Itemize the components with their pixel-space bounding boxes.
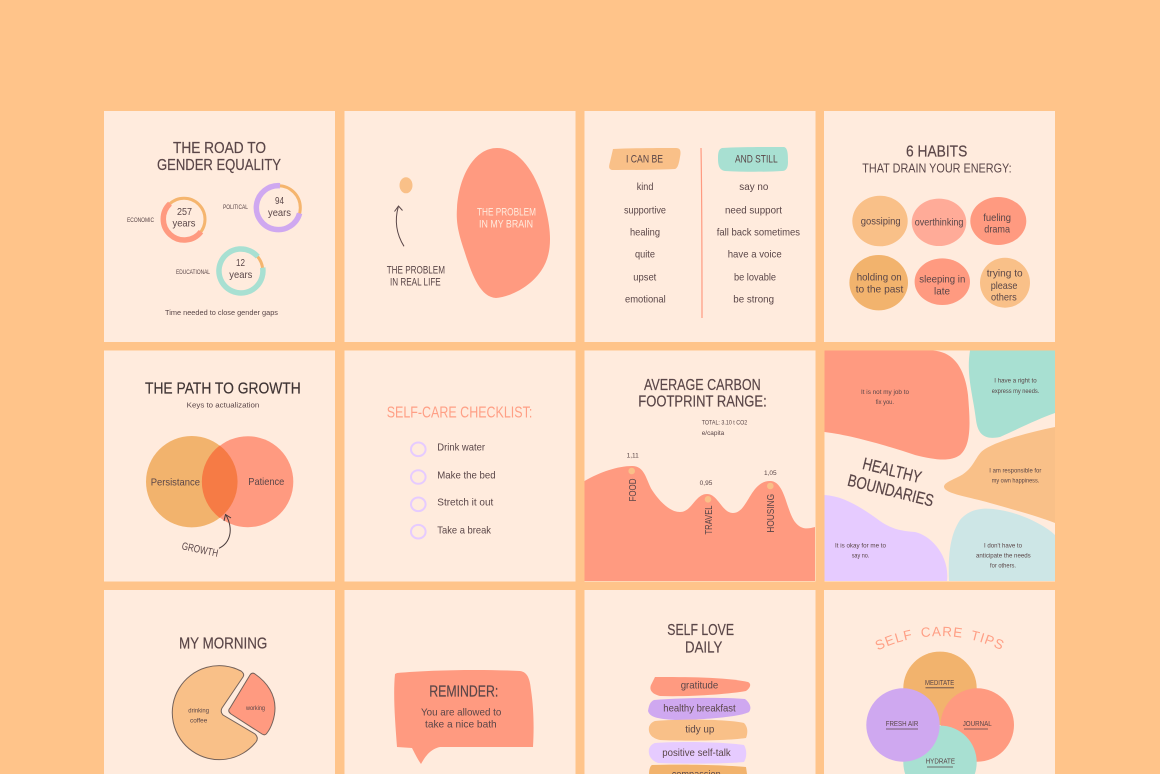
pie chart: working (245, 705, 265, 712)
divider line (701, 148, 702, 318)
panel: 6 habits (824, 111, 1055, 342)
blob: anticipate needs (949, 509, 1055, 581)
bubble: overthinking: overthinking (915, 217, 964, 229)
subheading: keys to actualization: Keys to actualization (187, 402, 259, 409)
list: and still: say no (739, 181, 768, 193)
heading: healthy boundaries (846, 454, 936, 511)
blob: anticipate needs: for others. (990, 563, 1016, 570)
ring: educational 12 years (219, 249, 263, 293)
text: the problem in real life: IN REAL LIFE (390, 277, 441, 289)
pie chart: coffee (190, 718, 208, 725)
heading: average carbon footprint range: FOOTPRINT RANGE: (638, 394, 767, 411)
blob: problem in my brain: THE PROBLEM (477, 207, 536, 219)
circle: fresh air (866, 688, 940, 762)
area chart: HOUSING (765, 494, 777, 533)
bubble: holding on to the past: holding on (857, 272, 902, 284)
stroke: gratitude: gratitude (681, 679, 718, 691)
bubble: trying to please others: trying to (987, 268, 1023, 280)
bubble: sleeping in late: late (934, 285, 950, 297)
blob: right to express: I have a right to (994, 378, 1037, 385)
dot: problem in real life (400, 177, 412, 193)
area chart: TRAVEL (703, 505, 715, 534)
list: and still: be lovable (734, 271, 776, 283)
heading: self love daily: SELF LOVE (667, 622, 734, 639)
bubble: gossiping: gossiping (861, 215, 901, 227)
tag: and still (718, 147, 788, 172)
panel: i can be and still (584, 111, 816, 342)
stroke: positive self-talk (649, 742, 746, 764)
bubble: trying to please others: please (991, 280, 1018, 292)
circle: meditate (903, 652, 977, 725)
heading: the road to gender equality: GENDER EQUALITY (157, 157, 281, 174)
heading: 6 habits (862, 144, 1012, 175)
venn diagram (146, 436, 293, 527)
checklist items: Make the bed (437, 469, 496, 481)
blob: not my job: It is not my job to (861, 389, 909, 396)
stroke: compassion (649, 765, 747, 774)
list: and still (717, 181, 800, 305)
circle: meditate: MEDITATE (925, 680, 955, 687)
heading: self love daily: DAILY (685, 639, 723, 656)
list: i can be: emotional (625, 293, 666, 305)
ring: economic 257 years: years (172, 218, 196, 230)
list: i can be (624, 181, 666, 305)
caption: time needed: Time needed to close gender gaps (165, 310, 279, 317)
heading: self care tips (arched): SELF CARE TIPS (876, 626, 1004, 650)
stroke: positive self-talk: positive self-talk (662, 747, 731, 759)
panel: my morning (104, 590, 335, 774)
list: and still: fall back sometimes (717, 227, 800, 239)
panel: reminder (344, 590, 576, 774)
stroke: healthy breakfast: healthy breakfast (663, 703, 736, 715)
speech bubble: take a nice bath (425, 718, 497, 730)
speech bubble: You are allowed to (421, 707, 501, 719)
heading: self love daily (667, 622, 734, 656)
tag: and still: AND STILL (735, 153, 778, 165)
list: i can be: healing (630, 227, 660, 239)
panel: healthy boundaries (824, 350, 1055, 582)
blob: not my job: fix you. (876, 399, 894, 406)
circle: hydrate: HYDRATE (926, 758, 955, 765)
ring: political 94 years (256, 186, 300, 230)
area chart: 1,05 (764, 470, 777, 477)
speech bubble: REMINDER: (429, 684, 498, 701)
circle: journal: JOURNAL (963, 721, 992, 728)
area chart (584, 452, 815, 581)
heading: the road to gender equality (157, 140, 281, 174)
ring: political 94 years: 94 (275, 195, 284, 207)
checklist items: Drink water (437, 441, 485, 453)
pie chart: drinking (188, 708, 209, 715)
blob: problem in my brain (457, 148, 550, 298)
venn diagram: Persistance (151, 477, 200, 489)
panel: self care tips (824, 590, 1055, 774)
heading: average carbon footprint range: AVERAGE CARBON (644, 377, 761, 394)
list: and still: have a voice (728, 249, 782, 261)
blob: anticipate needs: I don't have to (984, 542, 1022, 549)
checklist items (411, 441, 496, 538)
blob: my own happiness (944, 427, 1055, 523)
heading: the road to gender equality: THE ROAD TO (173, 140, 266, 157)
arrow: upward (394, 206, 404, 246)
label: political: POLITICAL (223, 204, 248, 211)
blob: my own happiness: my own happiness. (992, 478, 1039, 485)
tag: i can be: I CAN BE (626, 153, 663, 165)
heading: the path to growth: THE PATH TO GROWTH (145, 380, 301, 397)
panel: carbon footprint (584, 350, 816, 582)
blob: not my job (824, 350, 970, 460)
blob: okay to say no (824, 495, 947, 581)
list: i can be: supportive (624, 205, 666, 217)
ring: educational 12 years: years (229, 269, 252, 281)
panel: self love daily (584, 590, 816, 774)
list: and still: be strong (733, 293, 774, 305)
blob: anticipate needs: anticipate the needs (976, 553, 1031, 560)
circle: journal (941, 688, 1014, 762)
list: i can be: quite (635, 249, 655, 261)
heading: my morning: MY MORNING (179, 635, 267, 652)
stroke: tidy up (649, 720, 747, 741)
blob: my own happiness: I am responsible for (989, 467, 1042, 474)
list: i can be: upset (633, 271, 656, 283)
bubble: holding on to the past: to the past (856, 283, 903, 295)
blob: problem in my brain: IN MY BRAIN (479, 219, 533, 231)
blob: right to express (969, 350, 1055, 438)
note: total co2: TOTAL: 3.10 t CO2 (702, 419, 748, 426)
stroke: gratitude (650, 677, 750, 696)
tag: i can be (609, 148, 681, 170)
bubble: gossiping (852, 196, 908, 246)
arrow: growth (219, 514, 231, 548)
bubble: sleeping in late: sleeping in (919, 273, 965, 285)
area chart: 0,95 (700, 480, 713, 487)
checklist items: Take a break (437, 524, 492, 536)
ring: educational 12 years: 12 (236, 257, 245, 269)
area chart: 1,11 (627, 452, 639, 459)
ring: economic 257 years (163, 198, 205, 240)
pie chart (172, 666, 275, 760)
label: educational: EDUCATIONAL (176, 269, 210, 276)
heading: 6 habits: 6 HABITS (906, 144, 967, 161)
panel: path to growth (104, 350, 335, 582)
text: the problem in real life: THE PROBLEM (387, 265, 445, 277)
text: the problem in real life (387, 265, 445, 289)
heading: 6 habits: THAT DRAIN YOUR ENERGY: (862, 160, 1012, 175)
panel: gender equality (104, 111, 335, 342)
heading: healthy boundaries: HEALTHY (861, 454, 923, 487)
blob: right to express: express my needs. (992, 388, 1039, 395)
heading: self-care checklist: SELF-CARE CHECKLIST: (387, 405, 532, 422)
bubble: fueling drama: drama (984, 224, 1010, 236)
bubble: holding on to the past (849, 255, 908, 310)
ring: political 94 years: years (268, 207, 291, 219)
circle: fresh air: FRESH AIR (886, 721, 918, 728)
bubble: overthinking (912, 199, 966, 246)
panel: self-care checklist (344, 350, 576, 582)
bubble: fueling drama (970, 197, 1026, 245)
heading: average carbon footprint range (638, 377, 767, 411)
blob: okay to say no: It is okay for me to (835, 542, 886, 549)
panel: problem in real life vs brain (344, 111, 576, 342)
circle: hydrate (903, 726, 977, 774)
bubble: sleeping in late (915, 258, 970, 305)
speech bubble (394, 670, 534, 764)
stroke: tidy up: tidy up (685, 724, 714, 736)
label: economic: ECONOMIC (127, 217, 154, 224)
note: total co2: e/capita (702, 430, 725, 437)
bubble: trying to please others: others (991, 292, 1017, 304)
bubble: trying to please others (980, 258, 1030, 308)
heading: healthy boundaries: BOUNDARIES (846, 471, 936, 511)
note: total co2 (702, 419, 748, 437)
stroke: healthy breakfast (648, 698, 750, 720)
list: i can be: kind (637, 181, 654, 193)
checklist items: Stretch it out (437, 497, 493, 509)
label: growth: GROWTH (181, 540, 219, 560)
area chart: FOOD (627, 478, 639, 502)
ring: economic 257 years: 257 (177, 206, 192, 218)
venn diagram: Patience (248, 476, 284, 488)
blob: okay to say no: say no. (852, 553, 869, 560)
list: and still: need support (725, 205, 782, 217)
bubble: fueling drama: fueling (983, 212, 1011, 224)
